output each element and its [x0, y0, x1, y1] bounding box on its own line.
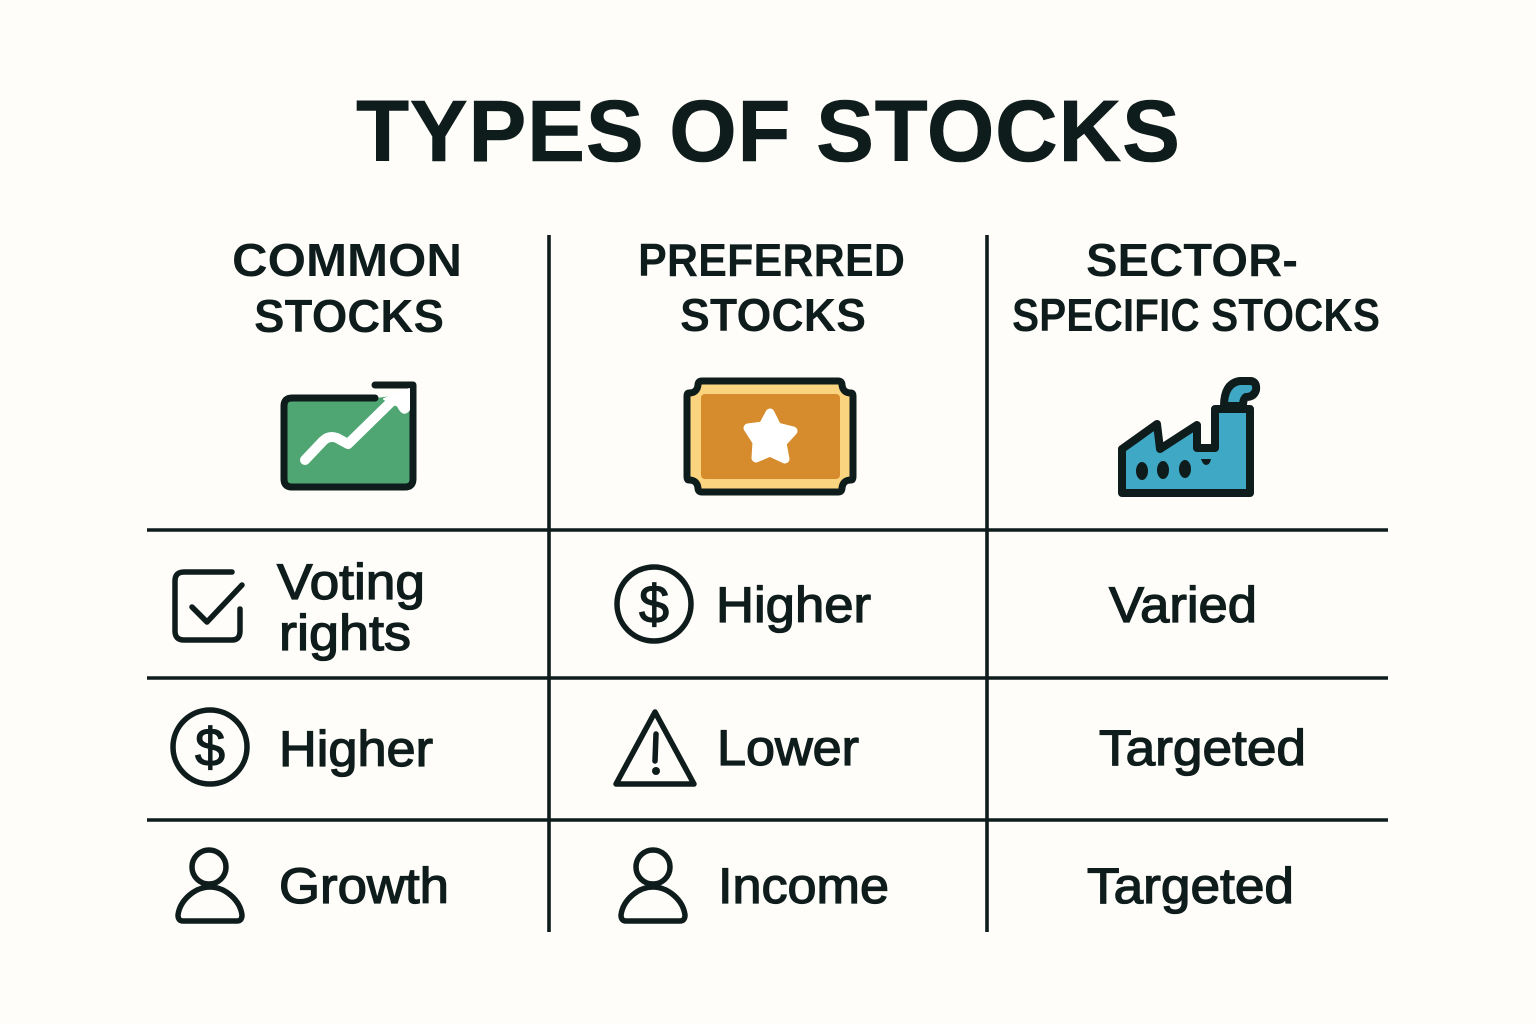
icon: orange ticket with star	[687, 381, 853, 492]
panel: sector-specific stocks column	[1012, 234, 1380, 914]
label: income: Income	[718, 858, 889, 914]
heading: common stocks: STOCKS	[254, 290, 444, 342]
label: higher: Higher	[279, 721, 433, 777]
row: lower	[616, 712, 859, 784]
row: growth	[178, 850, 449, 921]
table grid lines	[147, 235, 1388, 932]
icon: dollar coin: $	[195, 718, 225, 778]
heading: preferred stocks	[638, 234, 905, 341]
heading: sector-specific stocks	[1012, 234, 1380, 341]
label: voting rights: Voting	[277, 554, 425, 610]
icon: dollar coin	[617, 567, 691, 641]
icon: green growth chart	[284, 385, 413, 487]
label: targeted (goal row): Targeted	[1087, 858, 1294, 914]
row: higher	[173, 710, 433, 784]
icon: checkbox	[175, 572, 242, 640]
label: varied: Varied	[1109, 577, 1257, 633]
icon: dollar coin: $	[639, 575, 669, 635]
icon: person	[178, 850, 242, 921]
panel: preferred stocks column	[616, 234, 905, 921]
heading: sector-specific stocks: SPECIFIC STOCKS	[1012, 289, 1380, 341]
label: voting rights: rights	[279, 605, 411, 661]
label: targeted (risk row): Targeted	[1099, 720, 1306, 776]
heading: preferred stocks: STOCKS	[680, 289, 866, 341]
row: higher	[617, 567, 871, 641]
icon: blue factory	[1122, 381, 1256, 493]
label: lower: Lower	[717, 720, 859, 776]
title: TYPES OF STOCKS	[356, 83, 1180, 180]
heading: sector-specific stocks: SECTOR-	[1086, 234, 1298, 286]
label: growth: Growth	[279, 858, 449, 914]
icon: warning triangle	[616, 712, 694, 784]
icon: person	[621, 850, 685, 921]
heading: common stocks: COMMON	[232, 234, 462, 286]
row: voting rights	[175, 554, 425, 661]
label: higher: Higher	[716, 577, 871, 633]
row: income	[621, 850, 889, 921]
label: voting rights	[277, 554, 425, 661]
panel: common stocks column	[173, 234, 462, 921]
heading: common stocks	[232, 234, 462, 342]
heading: preferred stocks: PREFERRED	[638, 234, 905, 286]
icon: dollar coin	[173, 710, 247, 784]
